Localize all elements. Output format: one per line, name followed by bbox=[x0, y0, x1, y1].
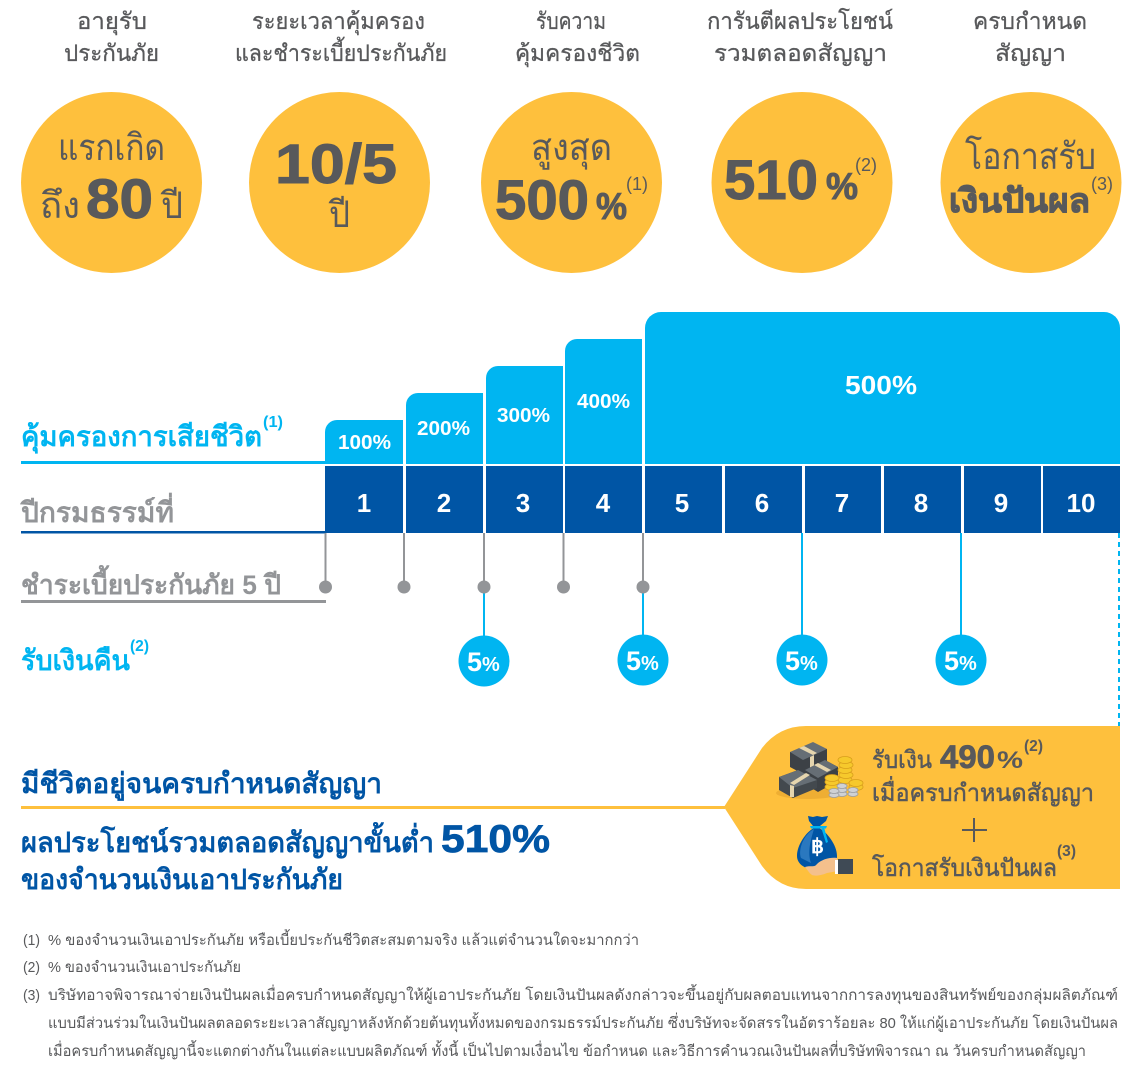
circle: 10/5 years: ปี bbox=[328, 194, 350, 235]
refund row label: (2) bbox=[130, 638, 149, 655]
icon: money bag in hand bbox=[797, 816, 853, 876]
coverage percent labels: 100% bbox=[338, 432, 391, 454]
policy year numbers: 3 bbox=[516, 488, 530, 518]
circle: entry age: ปี bbox=[160, 185, 183, 226]
circle: dividend opportunity: เงินปันผล bbox=[949, 182, 1090, 219]
minimum benefit statement: 510% bbox=[441, 818, 550, 861]
footnotes: แบบมีส่วนร่วมในเงินปันผลตลอดระยะเวลาสัญญาหลังหักด้วยต้นทุนทั้งหมดของกรมธรรม์ประกันภัย ซึ่งบริษัทจะจัดสรรในอัตราร้อยละ 80 ให้แก่ผู้เอาประกันภัย โดยเงินปันผล bbox=[48, 1012, 1118, 1033]
circle: 510%: 510 bbox=[724, 148, 818, 211]
policy year numbers: 10 bbox=[1067, 488, 1095, 518]
coverage label bbox=[21, 414, 325, 464]
policy year numbers bbox=[357, 488, 1095, 518]
heading: coverage and premium period: ระยะเวลาคุ้มครอง bbox=[252, 8, 425, 35]
callout text: dividend: (3) bbox=[1057, 843, 1076, 860]
dotted connector to maturity bbox=[1118, 533, 1120, 726]
footnotes: % ของจำนวนเงินเอาประกันภัย หรือเบี้ยประกันชีวิตสะสมตามจริง แล้วแต่จำนวนใดจะมากกว่า bbox=[48, 929, 639, 949]
callout text: 490%: % bbox=[997, 747, 1023, 774]
heading: entry age bbox=[64, 8, 159, 66]
coverage percent labels: 400% bbox=[577, 391, 630, 413]
circle: entry age: 80 bbox=[86, 167, 153, 230]
icon: money stacks and coins bbox=[776, 742, 863, 799]
policy year numbers: 4 bbox=[596, 488, 611, 518]
footnotes: (3) bbox=[23, 987, 40, 1004]
coverage steps bbox=[325, 312, 1120, 464]
footnotes: (1) bbox=[23, 932, 40, 949]
circle: up to 500%: สูงสุด bbox=[531, 127, 612, 170]
callout text: 490%: รับเงิน bbox=[872, 747, 932, 774]
heading: maturity: สัญญา bbox=[995, 40, 1066, 66]
circle: 10/5 years: 10/5 bbox=[275, 132, 397, 195]
premium payment row: ชำระเบี้ยประกันภัย 5 ปี bbox=[21, 564, 281, 600]
premium payment row bbox=[21, 533, 644, 603]
refund badges 5% bbox=[458, 634, 986, 686]
refund connectors bbox=[483, 533, 962, 642]
icon: plus bbox=[962, 818, 987, 842]
heading: coverage and premium period: และชำระเบี้ยประกันภัย bbox=[235, 37, 447, 66]
policy year numbers: 2 bbox=[437, 488, 451, 518]
minimum benefit statement: ผลประโยชน์รวมตลอดสัญญาขั้นต่ำ bbox=[21, 821, 434, 859]
coverage percent labels: 300% bbox=[497, 405, 550, 427]
circle: dividend opportunity bbox=[940, 92, 1122, 273]
callout text: 490%: 490 bbox=[940, 739, 995, 775]
circle: 510% bbox=[712, 92, 892, 273]
refund badges 5%: 5% bbox=[944, 646, 977, 676]
footnotes: (2) bbox=[23, 959, 40, 976]
circle: entry age: ถึง bbox=[40, 185, 80, 226]
circle: up to 500%: 500 bbox=[495, 168, 589, 231]
circle: 10/5 years bbox=[249, 92, 430, 273]
refund badges 5%: 5% bbox=[626, 646, 659, 676]
policy year numbers: 7 bbox=[835, 488, 849, 518]
heading: entry age: ประกันภัย bbox=[64, 40, 159, 66]
maturity callout panel bbox=[724, 726, 1120, 889]
coverage label: (1) bbox=[263, 414, 283, 431]
footnotes: เมื่อครบกำหนดสัญญานี้จะแตกต่างกันในแต่ละแบบผลิตภัณฑ์ ทั้งนี้ เป็นไปตามเงื่อนไข ข้อกำหนด และวิธีการคำนวณเงินปันผลที่บริษัทพิจารณา ณ วันครบกำหนดสัญญา bbox=[48, 1040, 1086, 1060]
coverage percent labels: 200% bbox=[417, 418, 470, 440]
heading: life coverage bbox=[515, 8, 640, 67]
heading: entry age: อายุรับ bbox=[77, 8, 147, 35]
icon: money bag in hand: ฿ bbox=[811, 836, 824, 858]
minimum benefit statement bbox=[21, 818, 550, 895]
chart: coverage steps and policy years bbox=[19, 312, 1120, 534]
circle: 510%: % bbox=[826, 166, 858, 207]
heading: maturity bbox=[973, 8, 1087, 66]
footnotes bbox=[23, 929, 1118, 1060]
circle: entry age: แรกเกิด bbox=[58, 127, 165, 168]
coverage percent labels: 500% bbox=[845, 370, 917, 400]
refund badges 5%: 5% bbox=[785, 646, 818, 676]
policy year cells bbox=[325, 466, 1120, 533]
heading: guaranteed benefits bbox=[707, 8, 893, 66]
heading: life coverage: รับความ bbox=[536, 8, 606, 34]
refund row label: รับเงินคืน bbox=[21, 645, 130, 676]
policy year numbers: 8 bbox=[914, 488, 928, 518]
policy year numbers: 9 bbox=[994, 488, 1008, 518]
circle: 510%: (2) bbox=[855, 155, 877, 175]
circle: up to 500%: % bbox=[596, 186, 627, 227]
circle: dividend opportunity: (3) bbox=[1091, 174, 1113, 194]
policy year numbers: 6 bbox=[755, 488, 769, 518]
maturity summary heading: มีชีวิตอยู่จนครบกำหนดสัญญา bbox=[21, 768, 382, 801]
heading: coverage and premium period bbox=[235, 8, 447, 66]
heading: guaranteed benefits: รวมตลอดสัญญา bbox=[714, 40, 887, 66]
policy year numbers: 5 bbox=[675, 488, 689, 518]
callout text: dividend bbox=[872, 843, 1076, 882]
heading: life coverage: คุ้มครองชีวิต bbox=[515, 40, 640, 67]
refund badges 5%: 5% bbox=[467, 647, 500, 677]
circle: up to 500%: (1) bbox=[626, 174, 648, 194]
callout text: 490% bbox=[872, 738, 1094, 807]
callout text: 490%: เมื่อครบกำหนดสัญญา bbox=[872, 776, 1094, 807]
policy year label: ปีกรมธรรม์ที่ bbox=[19, 492, 174, 528]
minimum benefit statement: ของจำนวนเงินเอาประกันภัย bbox=[21, 864, 343, 895]
circle: entry age bbox=[21, 92, 202, 273]
heading: maturity: ครบกำหนด bbox=[973, 8, 1087, 34]
circle: up to 500% bbox=[481, 92, 662, 273]
coverage label: คุ้มครองการเสียชีวิต bbox=[21, 421, 262, 454]
callout text: dividend: โอกาสรับเงินปันผล bbox=[872, 854, 1057, 882]
footnotes: % ของจำนวนเงินเอาประกันภัย bbox=[48, 959, 241, 976]
callout text: 490%: (2) bbox=[1024, 738, 1043, 755]
coverage percent labels bbox=[338, 370, 917, 454]
premium dots bbox=[319, 580, 650, 594]
policy year numbers: 1 bbox=[357, 488, 371, 518]
heading: guaranteed benefits: การันตีผลประโยชน์ bbox=[707, 8, 893, 34]
footnotes: บริษัทอาจพิจารณาจ่ายเงินปันผลเมื่อครบกำหนดสัญญาให้ผู้เอาประกันภัย โดยเงินปันผลดังกล่าวจะขึ้นอยู่กับผลตอบแทนจากการลงทุนของสินทรัพย์ของกลุ่มผลิตภัณฑ์ bbox=[48, 984, 1118, 1005]
maturity summary heading bbox=[21, 768, 725, 809]
circle: dividend opportunity: โอกาสรับ bbox=[965, 135, 1096, 177]
